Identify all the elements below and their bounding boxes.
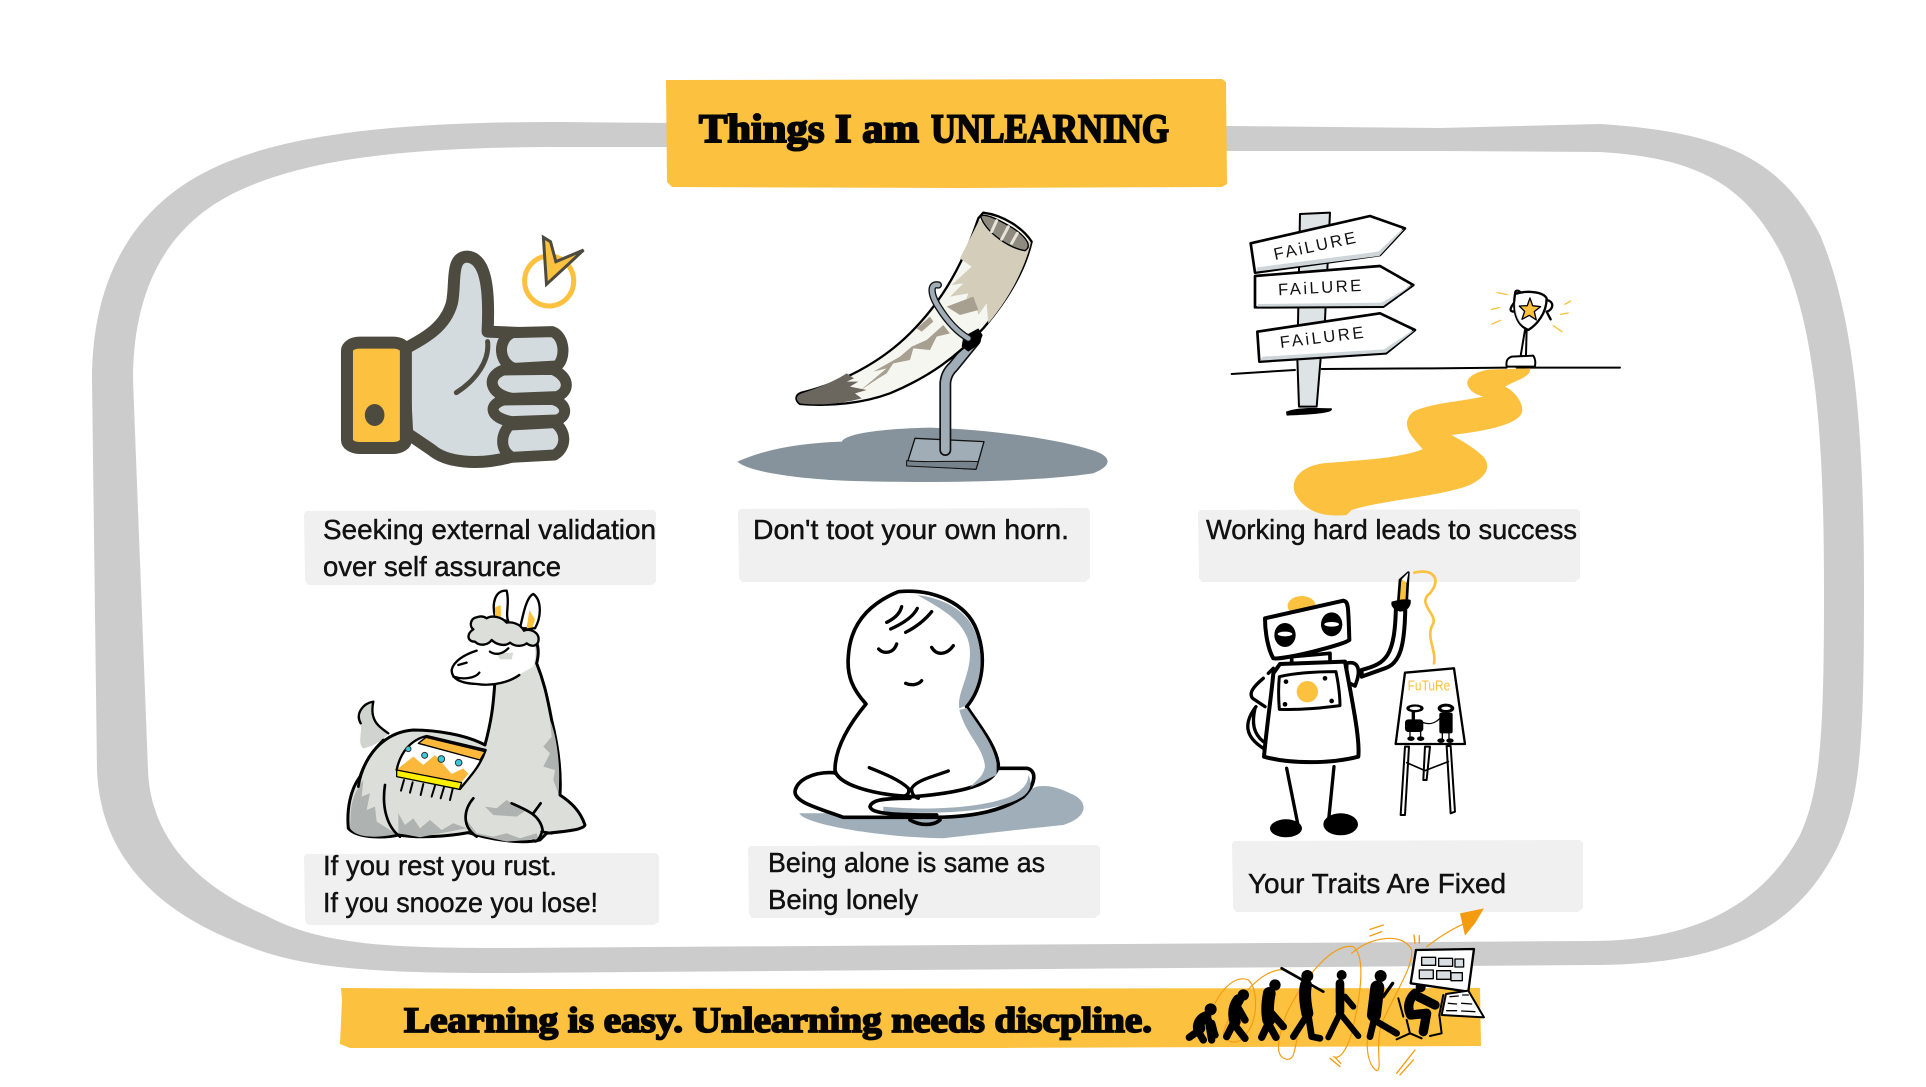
icon: robot drawing the future [1248,572,1465,837]
icon: trophy [1492,291,1571,367]
icon: thumbs up [347,257,566,462]
icon: meditating figure [795,591,1084,838]
panel: being alone [748,591,1100,918]
panel: seeking external validation [304,237,656,585]
caption text: Working hard leads to success [1206,514,1577,545]
caption text: If you rest you rust. [323,850,557,881]
title text: UNLEARNING [931,106,1169,151]
caption box [1232,840,1583,912]
caption text: Being alone is same as [768,847,1045,878]
caption box [738,508,1090,582]
icon: horn on stand [737,213,1108,482]
panel: working hard leads to success [1198,213,1620,582]
sign text: FAiLURE [1278,276,1362,299]
caption text: over self assurance [323,551,561,582]
icon: evolution of man with rocket arrow [1189,908,1484,1075]
bottom banner [340,988,1481,1048]
caption text: If you snooze you lose! [323,887,598,918]
caption text: Don't toot your own horn. [753,514,1069,545]
caption box [1198,509,1580,582]
sign text: FAiLURE [1279,323,1365,352]
caption box [748,845,1100,918]
caption text: Your Traits Are Fixed [1248,868,1506,899]
panel: if you rest you rust [304,591,659,925]
title text: Things I am [699,106,919,151]
panel: toot your own horn [737,213,1108,582]
caption text: Seeking external validation [323,514,656,545]
title banner [666,79,1227,188]
icon: failure signposts [1232,213,1620,416]
banner text: Learning is easy. Unlearning needs discpline. [404,1000,1152,1040]
panel: your traits are fixed [1232,572,1583,912]
yellow winding path [1294,368,1530,516]
chart word: FuTuRe [1408,679,1450,695]
caption text: Being lonely [768,884,918,915]
caption box [304,510,656,585]
grey hand-drawn rounded frame [92,122,1864,973]
sign text: FAiLURE [1272,228,1357,264]
caption box [304,853,659,925]
icon: resting llama [348,591,585,842]
icon: yellow check mark [525,237,584,306]
